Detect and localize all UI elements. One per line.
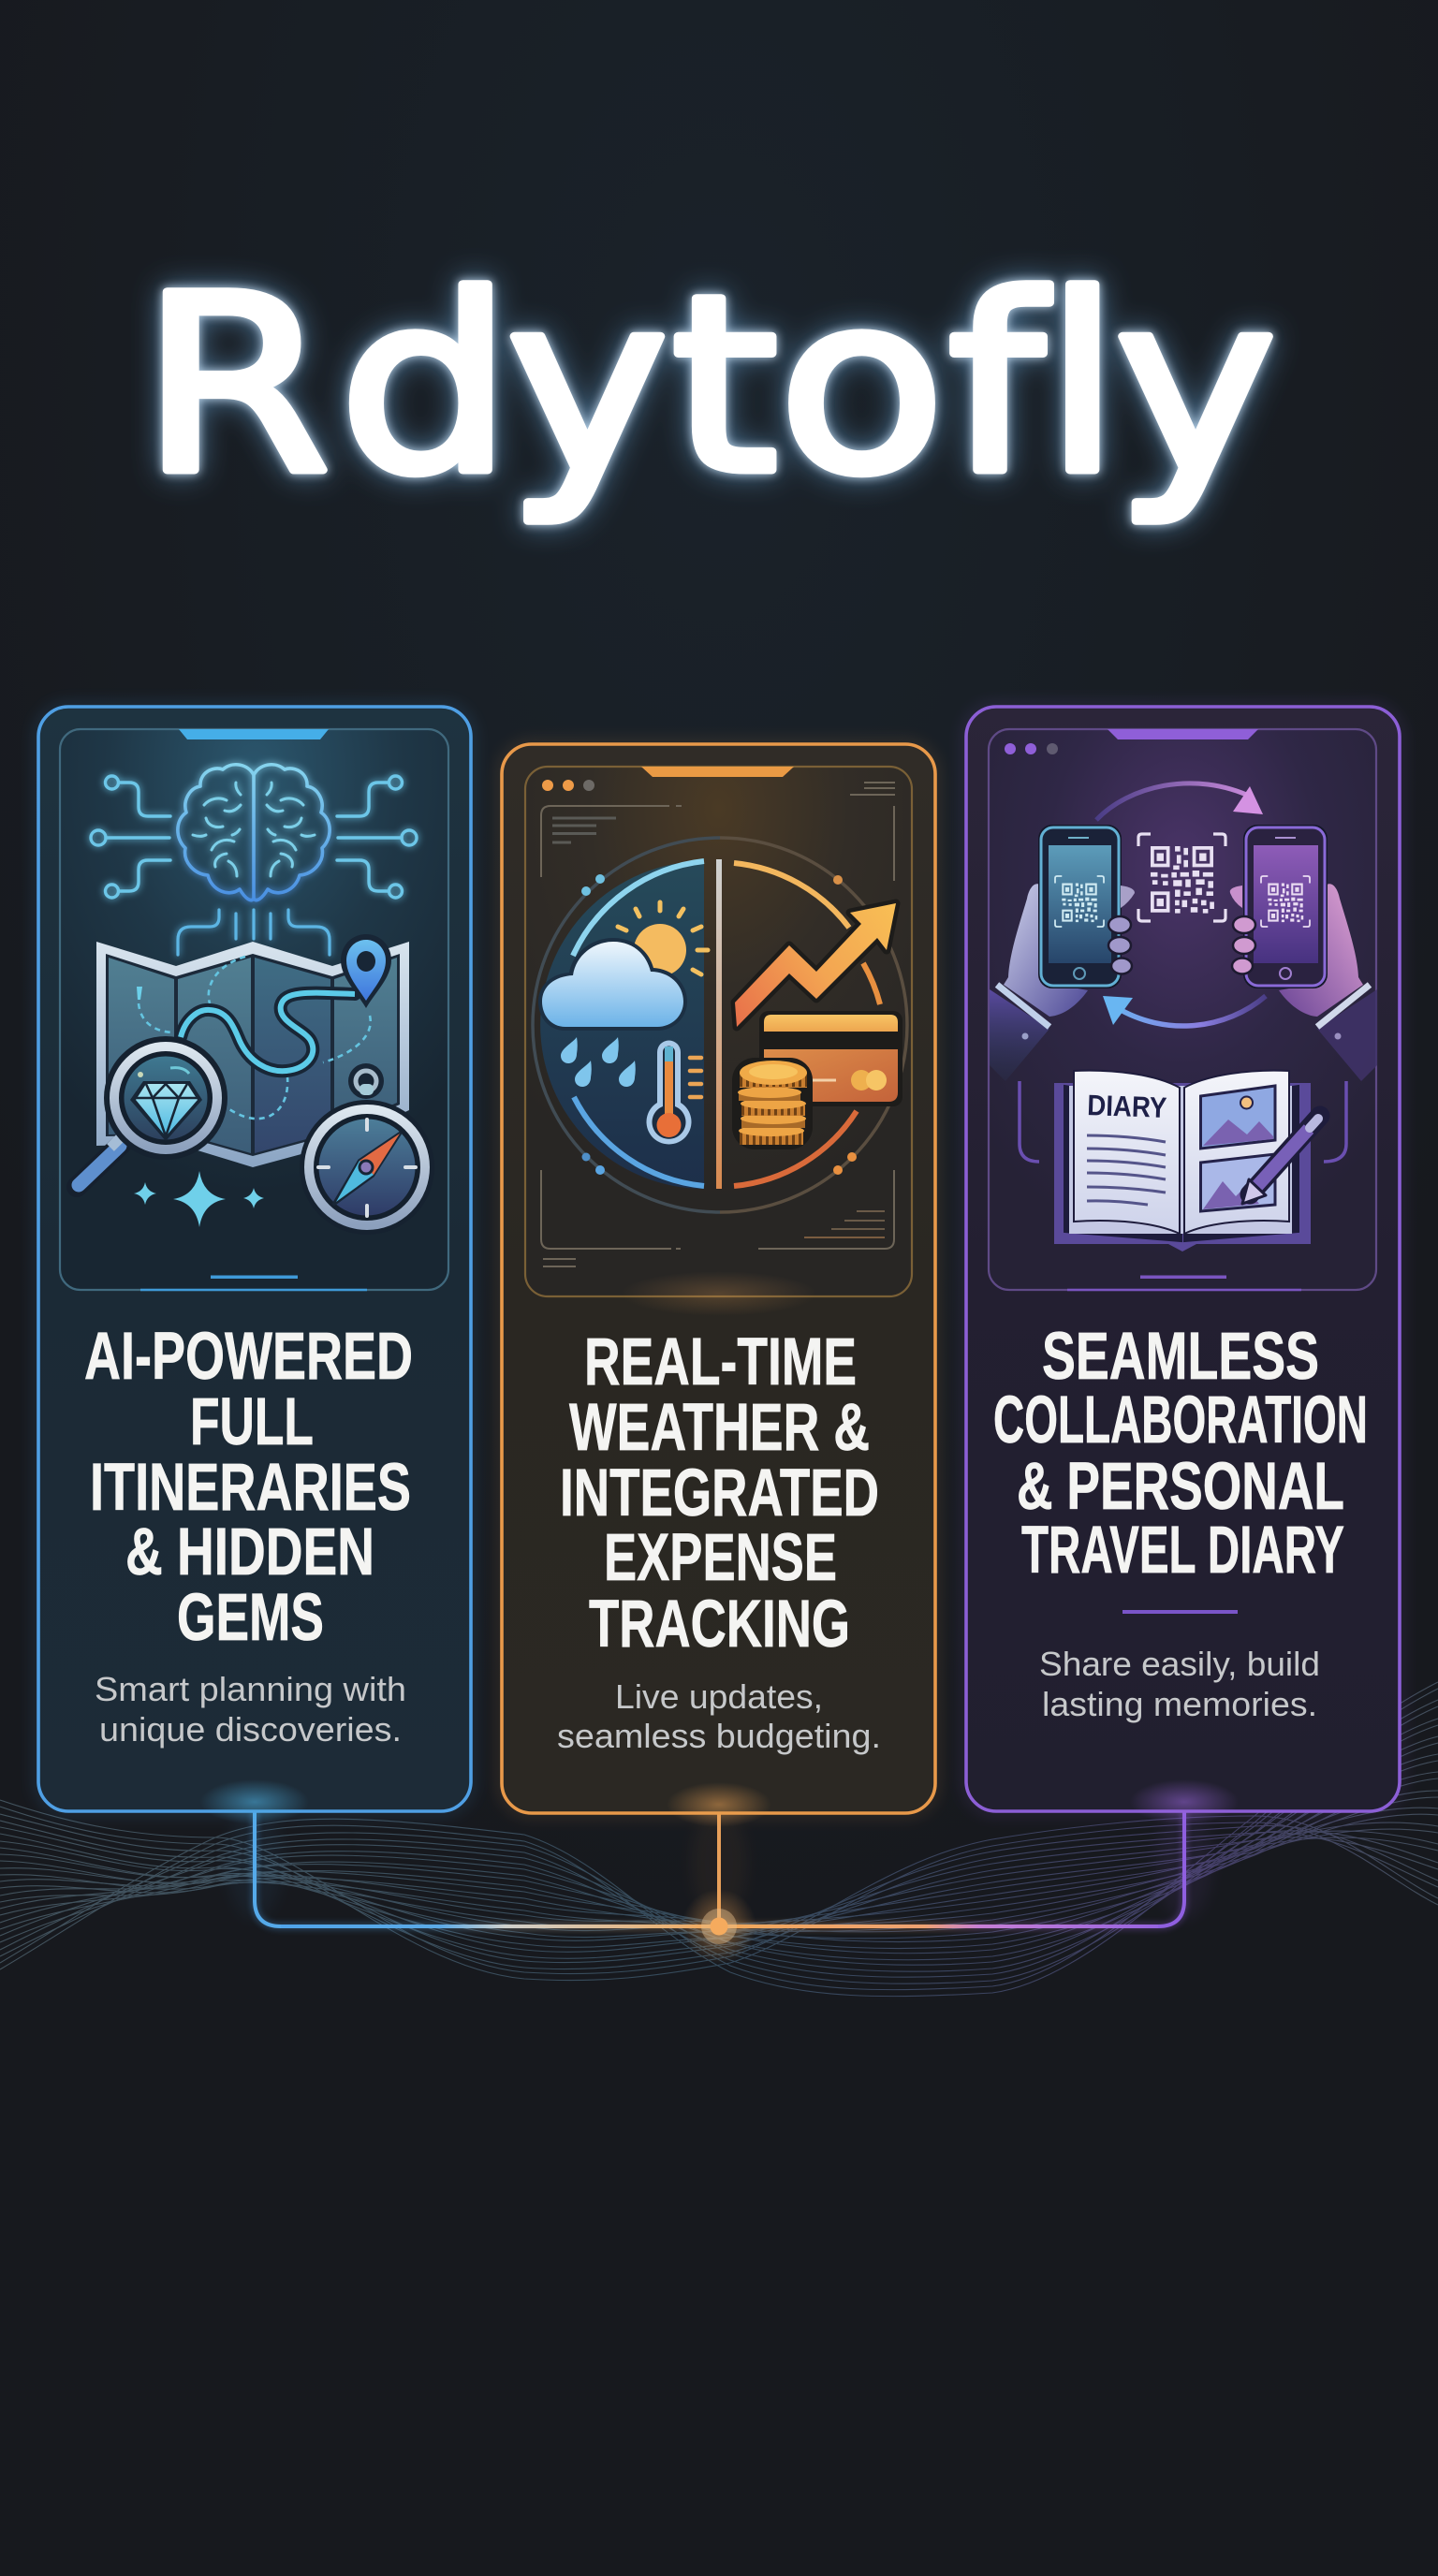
icon: open diary: DIARY xyxy=(1087,1089,1167,1124)
panel: weather and expenses card xyxy=(502,744,935,1827)
text: AI planning description: unique discoveries. xyxy=(99,1710,402,1749)
icon: weather half dial xyxy=(533,838,907,1212)
icon: coin stack xyxy=(732,1058,813,1149)
heading: real-time weather: EXPENSE xyxy=(604,1521,837,1595)
connector node xyxy=(682,1889,756,1964)
icon: location pin xyxy=(341,934,391,1008)
panel: AI planning card xyxy=(38,707,471,1824)
connector lines xyxy=(227,1807,1212,1926)
icon: compass xyxy=(300,1063,434,1235)
heading: real-time weather xyxy=(560,1325,879,1661)
text: AI planning description: Smart planning with xyxy=(95,1670,406,1708)
heading: real-time weather: INTEGRATED xyxy=(560,1456,879,1530)
heading: AI-powered itineraries: FULL xyxy=(190,1385,314,1459)
heading: AI-powered itineraries: AI-POWERED xyxy=(84,1320,413,1394)
heading: real-time weather: WEATHER & xyxy=(569,1391,870,1465)
text: collaboration description: lasting memories. xyxy=(1042,1685,1317,1723)
heading: AI-powered itineraries: GEMS xyxy=(177,1581,324,1655)
heading: AI-powered itineraries xyxy=(84,1320,413,1655)
title: Rdytofly xyxy=(140,244,1277,528)
heading: real-time weather: REAL-TIME xyxy=(584,1325,857,1399)
heading: seamless collaboration xyxy=(993,1320,1368,1588)
icon: left hand holding phone xyxy=(990,884,1088,1081)
icon: folded map xyxy=(96,942,409,1167)
icon: rising arrow xyxy=(735,903,896,1027)
divider xyxy=(1123,1610,1238,1614)
heading: AI-powered itineraries: & HIDDEN xyxy=(125,1515,374,1589)
text: AI planning description xyxy=(95,1670,406,1749)
text: collaboration description: Share easily, build xyxy=(1039,1645,1320,1683)
background wave lines xyxy=(0,1682,1438,1997)
text: collaboration description xyxy=(1039,1645,1320,1723)
text: weather description: Live updates, xyxy=(615,1677,823,1716)
text: weather description xyxy=(557,1677,881,1755)
icon: left phone with QR xyxy=(1038,825,1135,988)
text: weather description: seamless budgeting. xyxy=(557,1717,881,1755)
heading: AI-powered itineraries: ITINERARIES xyxy=(90,1451,411,1525)
icon: pen xyxy=(1242,1116,1320,1204)
heading: seamless collaboration: SEAMLESS xyxy=(1042,1320,1319,1394)
icon: expense dial and rising arrow xyxy=(734,863,880,1186)
icon: credit card xyxy=(759,1011,902,1106)
icon: right hand holding phone xyxy=(1279,884,1377,1081)
icon: thermometer xyxy=(646,1041,701,1144)
icon: sync arrows xyxy=(1096,783,1266,1026)
heading: real-time weather: TRACKING xyxy=(589,1588,850,1661)
icon: shared QR code xyxy=(1138,834,1225,921)
inner illustration panel xyxy=(989,729,1376,1290)
icon: AI brain with circuits xyxy=(91,765,417,955)
icon: right phone with QR xyxy=(1230,825,1328,988)
inner illustration panel xyxy=(60,729,448,1290)
panel: collaboration and diary card xyxy=(966,707,1400,1824)
icon: magnifier with gem xyxy=(77,1036,227,1187)
inner illustration panel xyxy=(525,767,912,1316)
icon: sparkles xyxy=(134,1171,264,1227)
icon: open diary xyxy=(1020,1071,1346,1251)
